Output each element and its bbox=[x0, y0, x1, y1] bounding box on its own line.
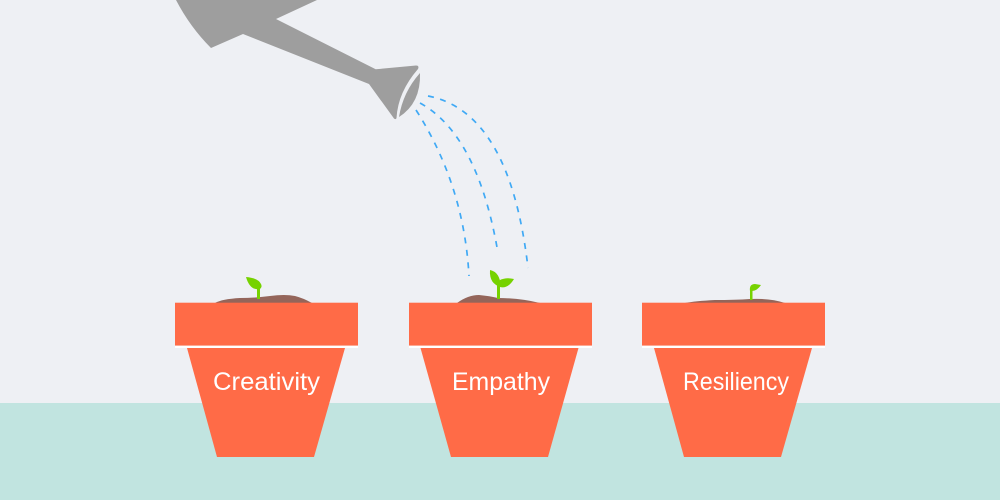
body bbox=[420, 348, 578, 457]
rim bbox=[175, 303, 358, 346]
pot: resiliency bbox=[642, 284, 825, 457]
pot: empathy bbox=[409, 270, 592, 457]
soil bbox=[215, 295, 312, 303]
ground band bbox=[0, 403, 1000, 500]
water streams bbox=[416, 96, 528, 276]
body bbox=[654, 348, 812, 457]
middle stream bbox=[420, 103, 498, 253]
body bbox=[187, 348, 345, 457]
rim bbox=[409, 303, 592, 346]
label: Creativity bbox=[213, 368, 321, 396]
rim highlight bbox=[175, 346, 358, 348]
soil bbox=[457, 295, 540, 303]
left stream bbox=[416, 110, 469, 276]
watering can bbox=[176, 0, 420, 119]
rim highlight bbox=[642, 346, 825, 348]
rim bbox=[642, 303, 825, 346]
sprout bbox=[246, 277, 262, 299]
sprout bbox=[490, 270, 514, 299]
label: Resiliency bbox=[683, 368, 789, 396]
can body and spout bbox=[176, 0, 418, 119]
rim highlight bbox=[409, 346, 592, 348]
label: Empathy bbox=[452, 368, 550, 396]
nozzle face bbox=[399, 73, 420, 117]
sprout bbox=[750, 284, 761, 300]
right stream bbox=[428, 96, 528, 268]
pot: creativity bbox=[175, 277, 358, 457]
soil bbox=[685, 299, 785, 303]
